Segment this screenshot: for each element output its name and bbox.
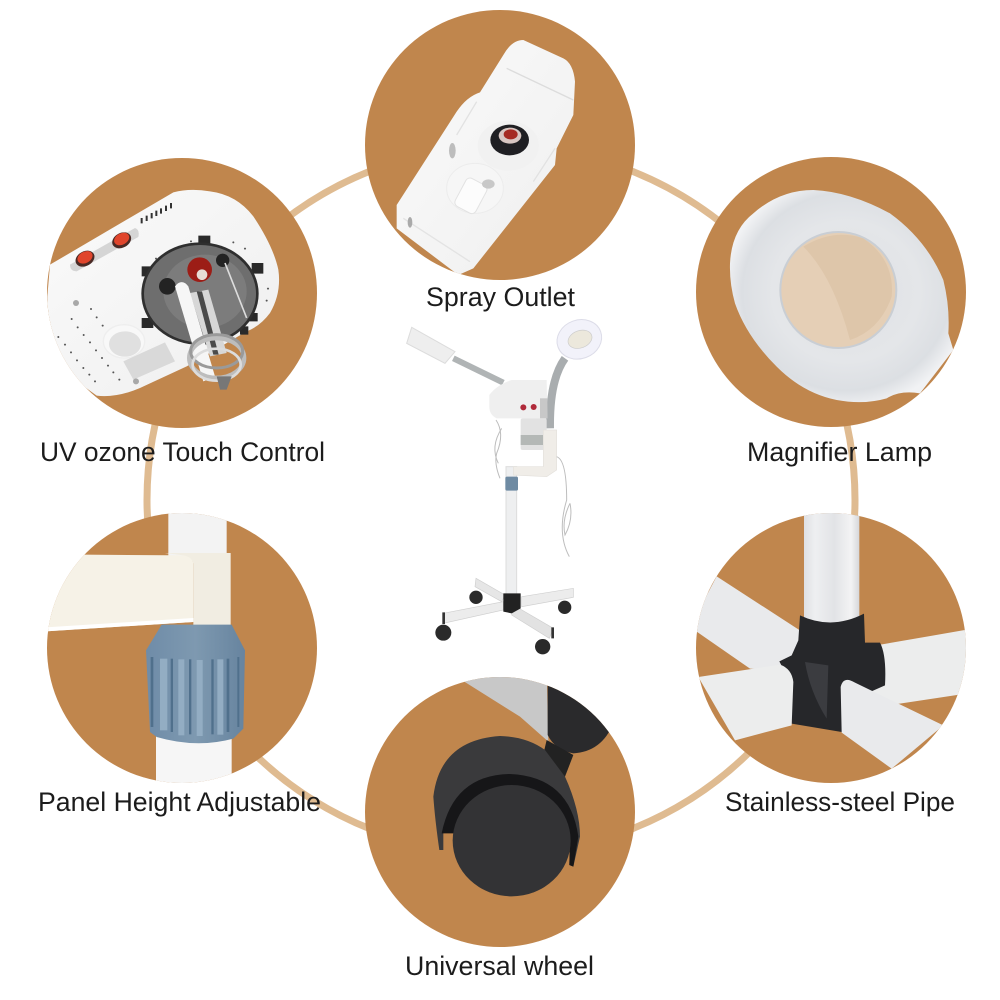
connecting ring <box>147 146 855 854</box>
panel: stainless-steel pipe <box>690 505 977 783</box>
label: stainless-steel pipe: Stainless-steel Pipe <box>725 787 955 817</box>
icon: spray arm <box>407 327 503 383</box>
label: magnifier lamp: Magnifier Lamp <box>747 437 932 467</box>
icon: wheeled base <box>435 578 573 654</box>
panel: magnifier lamp <box>696 157 966 427</box>
icon: steamer body <box>489 380 547 450</box>
label: panel height adjustable: Panel Height Adjustable <box>38 787 321 817</box>
panel: spray outlet <box>365 10 635 280</box>
product: facial steamer stand <box>407 313 607 654</box>
label: universal wheel: Universal wheel <box>405 951 594 981</box>
panel: universal wheel <box>365 670 635 947</box>
label: spray outlet: Spray Outlet <box>426 282 575 312</box>
icon: magnifier lamp <box>550 313 607 428</box>
panel: UV ozone touch control <box>47 158 317 428</box>
icon: pole <box>505 430 557 595</box>
icon: power cords <box>495 420 571 557</box>
panel: panel height adjustable <box>40 505 317 785</box>
label: UV ozone touch control: UV ozone Touch Control <box>40 437 325 467</box>
